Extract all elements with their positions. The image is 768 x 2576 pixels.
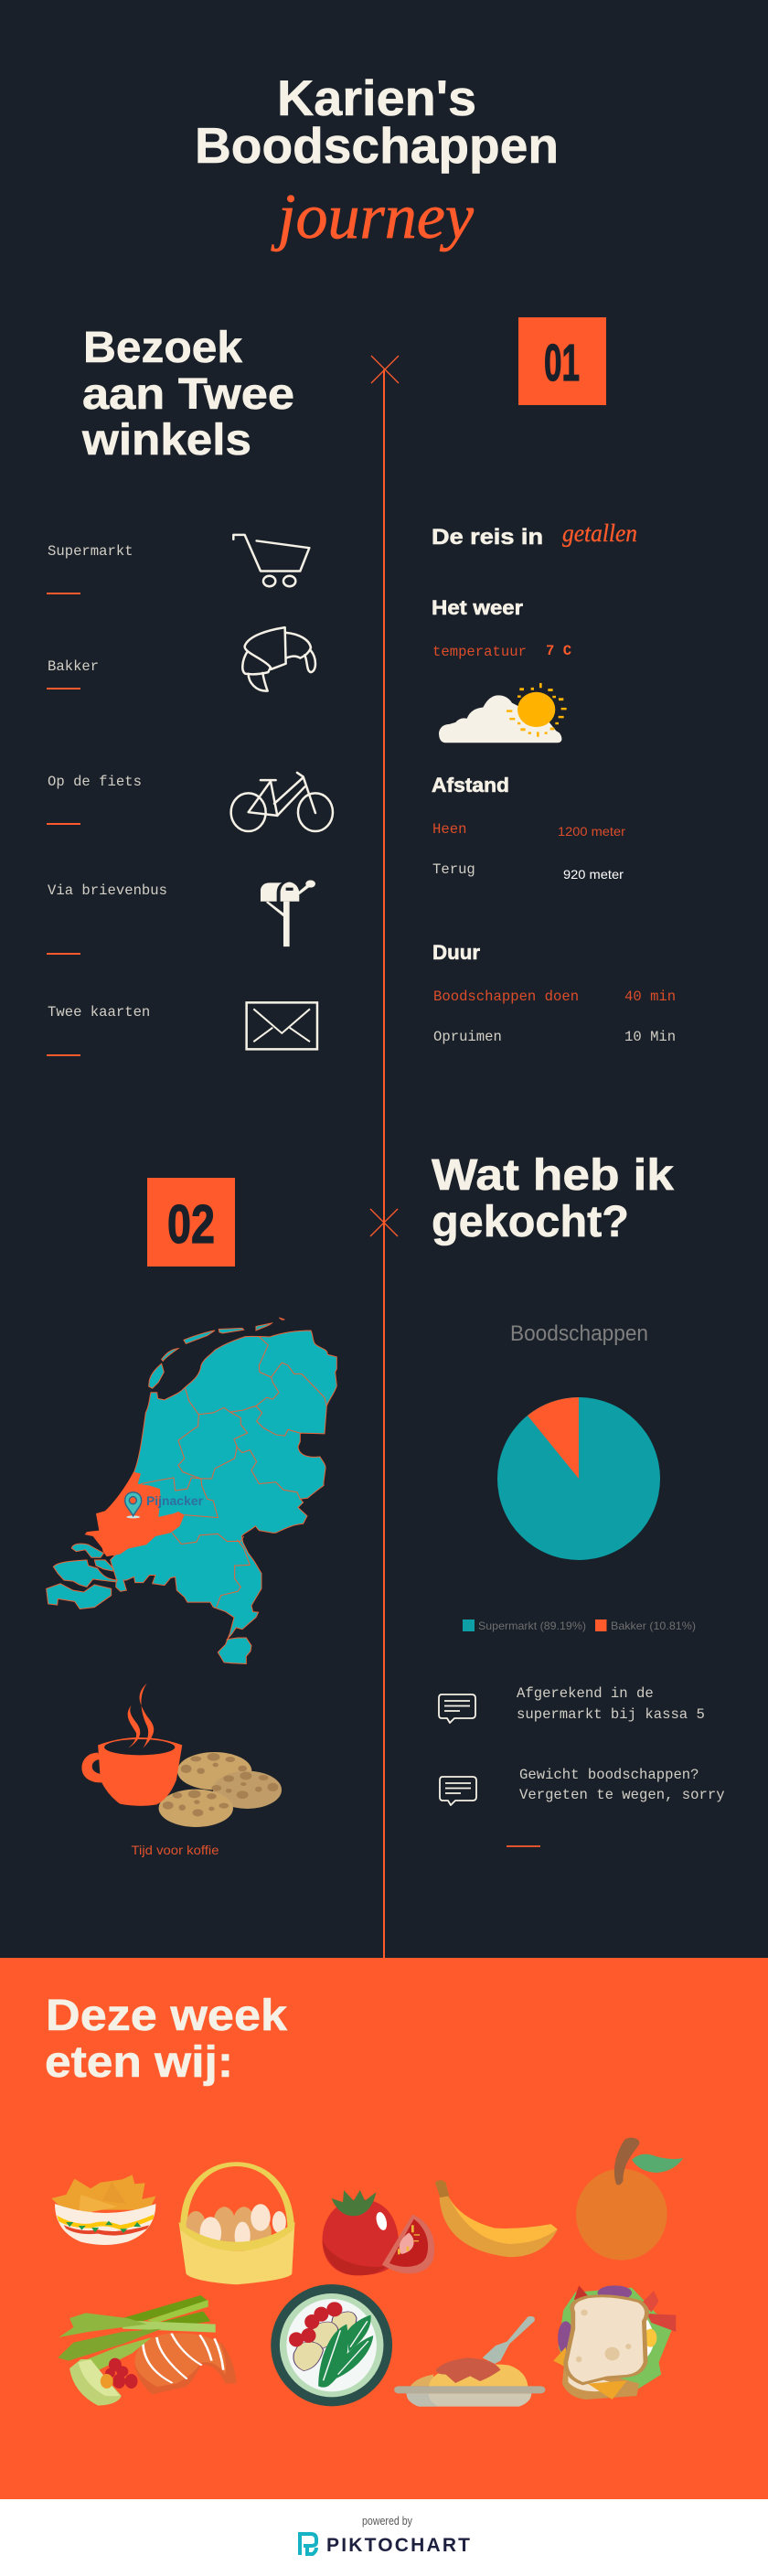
note: afgerekend [439, 1685, 705, 1723]
heading: eten wij: [45, 2038, 233, 2087]
title: Boodschappen [195, 117, 559, 174]
illustration: pasta with fork [394, 2316, 545, 2407]
panel: winkels list [47, 535, 333, 1056]
province borders [141, 1337, 326, 1608]
icon: envelope [247, 1002, 317, 1049]
avocado [69, 2359, 122, 2406]
heading: De reis in getallen: De reis in [432, 525, 543, 550]
cherry tomatoes [101, 2358, 138, 2389]
icon: speech bubble [439, 1694, 475, 1723]
list item: Twee kaarten: Twee kaarten [48, 1004, 150, 1021]
list item: Supermarkt [47, 543, 133, 594]
list item: Via brievenbus: Via brievenbus [48, 882, 167, 899]
pie [497, 1397, 660, 1560]
heading: Afstand: Afstand [432, 774, 509, 796]
list item: Op de fiets [47, 774, 142, 825]
chart title: Boodschappen [510, 1321, 648, 1346]
map: Netherlands [47, 1318, 336, 1663]
list item: Bakker [47, 658, 99, 689]
icon: cloud and sun [439, 683, 567, 743]
heading: Bezoek aan Twee winkels: aan Twee [82, 370, 294, 419]
temperature row: temperatuur [432, 644, 527, 660]
panel: Deze week eten wij [0, 1958, 768, 2499]
timeline line with cross markers [370, 356, 399, 1958]
temperature row [432, 643, 571, 660]
cup [81, 1683, 182, 1806]
title: Karien's [277, 69, 476, 126]
footer [0, 2499, 768, 2576]
section badge 01 [518, 317, 606, 405]
note: gewicht: Vergeten te wegen, sorry [519, 1787, 725, 1803]
distance rows: Terug [432, 861, 475, 878]
heading: Wat heb ik gekocht?: gekocht? [432, 1198, 629, 1246]
illustration: sandwich [553, 2285, 676, 2400]
main land [111, 1331, 336, 1663]
heading: Wat heb ik gekocht?: Wat heb ik [432, 1151, 674, 1200]
heading: Bezoek aan Twee winkels [81, 324, 294, 465]
list item: Op de fiets: Op de fiets [48, 774, 142, 790]
pie chart: Boodschappen [463, 1321, 696, 1632]
duration rows [433, 989, 676, 1045]
duration rows: 10 Min [624, 1029, 676, 1045]
distance rows: Heen [432, 821, 466, 838]
list item: Via brievenbus [47, 882, 167, 955]
distance rows: 920 meter [563, 867, 624, 882]
distance rows [432, 821, 625, 882]
note: gewicht: Gewicht boodschappen? [519, 1767, 699, 1783]
section badge 02 [147, 1178, 235, 1267]
heading: Duur: Duur [432, 941, 480, 964]
subtitle: journey: journey [271, 182, 475, 252]
heading: Het weer: Het weer [432, 596, 523, 619]
list item: Bakker: Bakker [48, 658, 99, 675]
legend: Supermarkt (89.19%) [478, 1619, 586, 1632]
icon: mailbox [261, 880, 315, 946]
logo: piktochart mark [300, 2534, 316, 2555]
icon: bicycle [231, 773, 333, 831]
title [195, 69, 559, 174]
legend: Bakker (10.81%) [611, 1619, 696, 1632]
header [195, 69, 559, 252]
illustration: nachos [51, 2175, 155, 2245]
distance rows: 1200 meter [558, 824, 625, 839]
divider accent [507, 1845, 540, 1847]
duration rows: Boodschappen doen [433, 989, 579, 1005]
asparagus [58, 2295, 216, 2373]
section badge 02: 02 [167, 1194, 215, 1255]
illustration: plate with potatoes and greens [271, 2284, 392, 2406]
caption: Tijd voor koffie: Tijd voor koffie [132, 1843, 219, 1857]
temperature row: 7 C [546, 643, 571, 659]
heading: Bezoek aan Twee winkels: Bezoek [83, 324, 242, 372]
list item: Twee kaarten [47, 1004, 150, 1056]
heading [45, 1992, 287, 2087]
icon: shopping cart [233, 535, 309, 586]
map pin [125, 1492, 142, 1518]
legend [463, 1619, 696, 1632]
map label: Pijnacker: Pijnacker [146, 1493, 204, 1508]
heading: Wat heb ik gekocht? [432, 1151, 674, 1246]
highlighted province: Zuid-Holland [85, 1472, 185, 1556]
powered by: powered by [362, 2514, 412, 2528]
heading: De reis in getallen: getallen [562, 519, 637, 547]
salmon [134, 2333, 237, 2394]
heading: Bezoek aan Twee winkels: winkels [81, 416, 251, 465]
duration rows: Opruimen [433, 1029, 502, 1045]
panel: de reis in getallen [432, 519, 676, 1045]
illustration: tomato [322, 2190, 434, 2275]
illustration: coffee and cookies [81, 1683, 282, 1827]
cookies [159, 1752, 282, 1827]
illustration: asparagus, salmon and avocado [58, 2295, 237, 2406]
illustration: egg basket [179, 2164, 294, 2284]
heading: Deze week [46, 1992, 287, 2040]
note: afgerekend: Afgerekend in de [517, 1685, 654, 1702]
wadden islands [149, 1318, 284, 1388]
icon: croissant [242, 627, 315, 691]
note: gewicht [440, 1767, 725, 1805]
logo: wordmark: PIKTOCHART [326, 2535, 470, 2556]
duration rows: 40 min [624, 989, 676, 1005]
heading: De reis in getallen [432, 519, 637, 550]
section badge 01: 01 [544, 334, 580, 392]
illustration: banana [435, 2180, 558, 2257]
illustration: orange fruit [576, 2138, 683, 2261]
zeeland islands [47, 1544, 117, 1609]
list item: Supermarkt: Supermarkt [48, 543, 133, 560]
icon: speech bubble [440, 1777, 476, 1805]
note: afgerekend: supermarkt bij kassa 5 [517, 1706, 705, 1723]
